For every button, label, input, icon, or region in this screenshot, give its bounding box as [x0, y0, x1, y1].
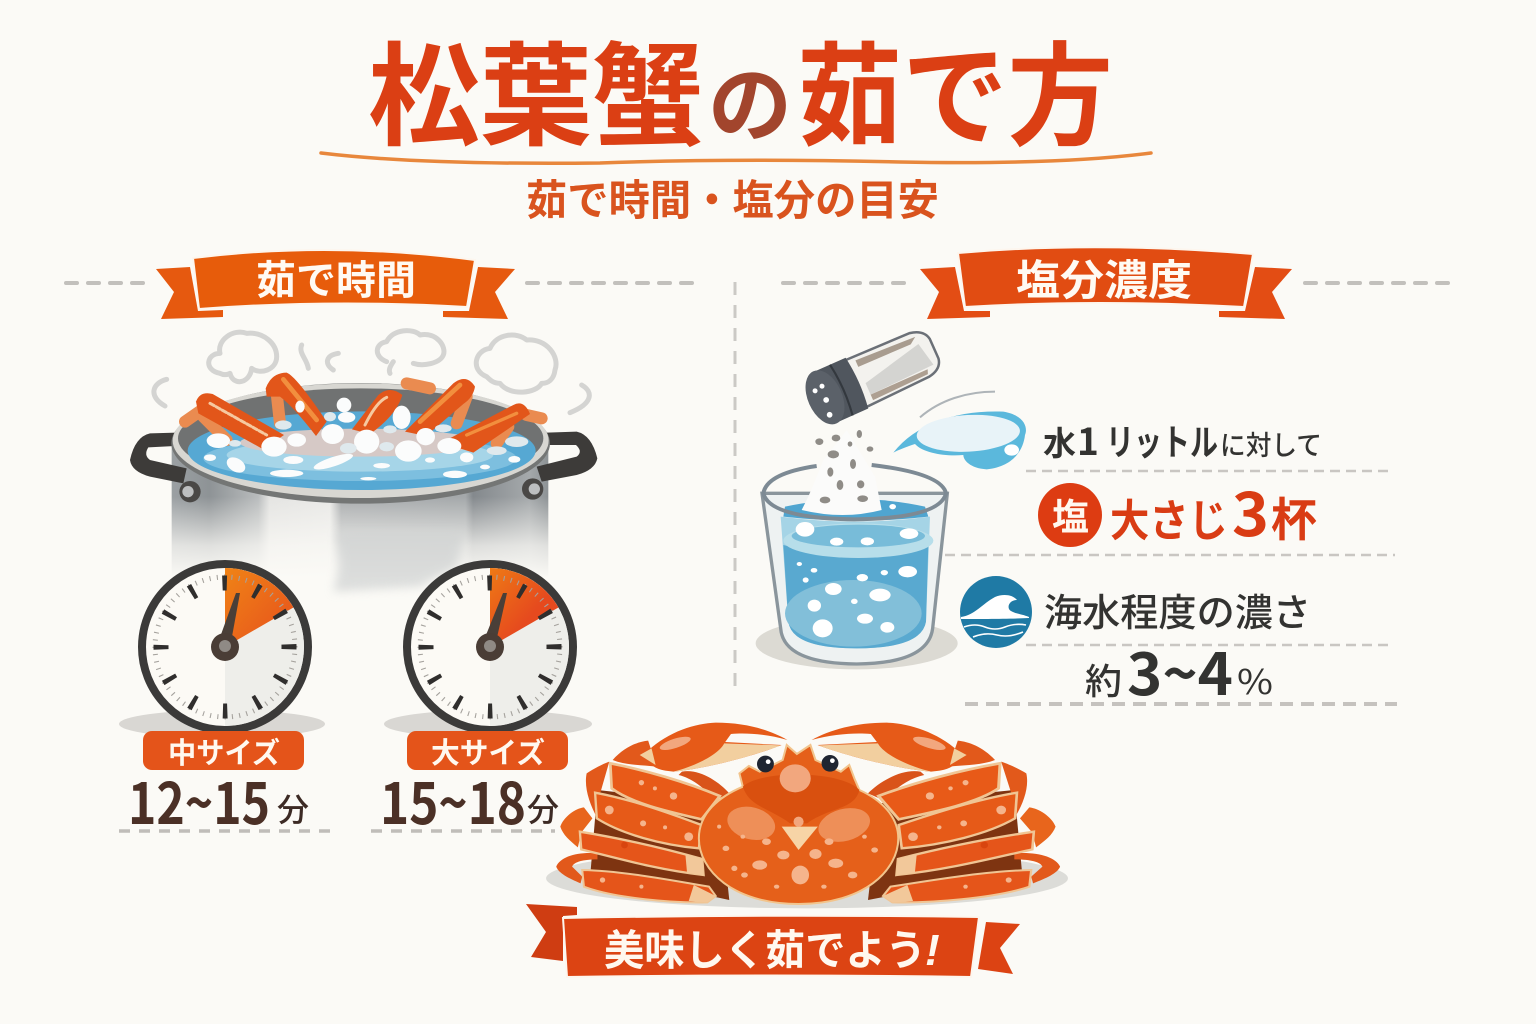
crab eyes	[757, 756, 774, 772]
salt bubbles	[796, 504, 918, 637]
bottom banner: 美味しく茹でよう	[604, 917, 926, 978]
text: three tablespoons: 大さじ	[1110, 485, 1228, 549]
ribbon heading: boiling time	[156, 248, 515, 319]
illustration: boiling pot with crab legs	[130, 331, 597, 592]
steam clouds	[154, 331, 589, 413]
falling salt	[802, 430, 882, 515]
title: 茹で方	[797, 7, 1113, 169]
foam bubbles	[204, 398, 520, 480]
subtitle: 茹で時間・塩分の目安	[526, 167, 939, 228]
illustration: snow crab	[546, 723, 1068, 908]
glass rim	[763, 465, 946, 519]
text: about 3 to 4 percent: 3~4	[1127, 628, 1233, 712]
pot handles	[130, 433, 187, 483]
text: three tablespoons	[1110, 467, 1317, 554]
badge: salt	[1038, 483, 1102, 547]
text: about 3 to 4 percent: 約	[1085, 653, 1122, 705]
text: per 1 litre of water	[1043, 412, 1322, 466]
timer clock: medium size	[142, 564, 308, 730]
title: の	[708, 39, 792, 160]
clock shadow: medium	[119, 710, 325, 738]
carapace	[699, 745, 898, 904]
crab legs	[196, 373, 530, 453]
time: large size: 分	[527, 785, 559, 831]
clock shadow: large	[384, 710, 592, 738]
text: per 1 litre of water: 1	[1077, 412, 1099, 466]
water splash	[893, 412, 1026, 469]
illustration: salt shaker pouring into glass	[756, 323, 1026, 669]
time: medium size: 12~15	[128, 759, 270, 841]
bottom banner	[526, 904, 1020, 978]
crab right legs	[868, 762, 1060, 902]
glass shadow	[756, 617, 958, 669]
label: large size: 大サイズ	[431, 730, 545, 772]
text: three tablespoons: 3	[1232, 467, 1269, 554]
shaker	[798, 323, 946, 430]
pot body	[172, 443, 548, 577]
glass body	[762, 493, 947, 664]
text: per 1 litre of water: 水	[1043, 417, 1076, 465]
timer clock: large size	[407, 564, 573, 730]
ribbon heading: salt concentration	[920, 247, 1292, 319]
ribbon heading: salt concentration: 塩分濃度	[1016, 247, 1192, 308]
crab shadow	[546, 848, 1068, 908]
title underline	[321, 153, 1151, 163]
text: three tablespoons: 杯	[1271, 484, 1317, 550]
text: seawater concentration: 海水程度の濃さ	[1044, 582, 1311, 637]
time: large size: 15~18	[380, 759, 526, 841]
title	[368, 7, 1113, 169]
water	[188, 411, 536, 490]
crab leg supports	[185, 383, 542, 443]
crab left legs	[556, 762, 729, 902]
text: about 3 to 4 percent	[1085, 628, 1273, 712]
label: medium size: 中サイズ	[168, 730, 280, 772]
text: about 3 to 4 percent: %	[1237, 655, 1273, 704]
ribbon heading: boiling time: 茹で時間	[256, 248, 416, 306]
crab left claw	[613, 723, 787, 772]
bottom banner: !	[925, 926, 940, 975]
badge: salt: 塩	[1052, 487, 1089, 541]
title: 松葉蟹	[368, 7, 704, 169]
crab right claw	[812, 723, 995, 772]
icon: sea wave	[960, 576, 1032, 648]
time: medium size: 分	[277, 785, 309, 831]
pot rim	[171, 383, 550, 504]
text: per 1 litre of water: に対して	[1220, 424, 1322, 463]
text: per 1 litre of water: リットル	[1106, 414, 1218, 466]
water in glass	[781, 517, 930, 648]
